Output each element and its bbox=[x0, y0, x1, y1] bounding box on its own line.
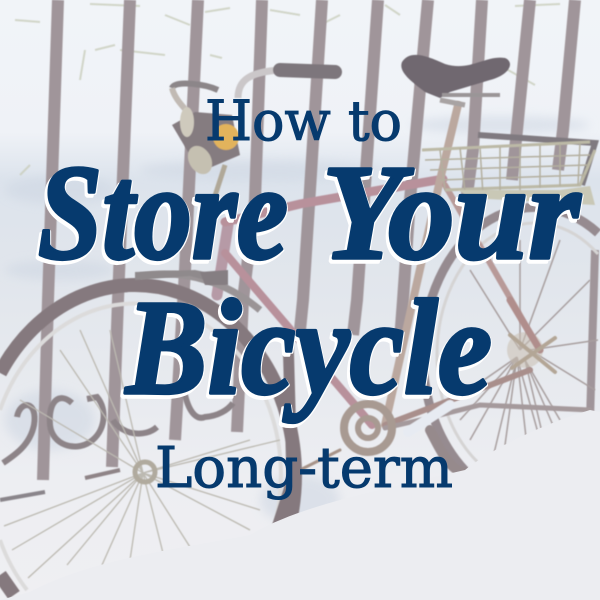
bicycle frame bbox=[217, 105, 590, 472]
rear wheel bbox=[423, 207, 598, 503]
heading: Store Your / Bicycle: Store bbox=[38, 138, 288, 288]
heading: Store Your / Bicycle: Bicycle bbox=[124, 273, 492, 423]
title bbox=[38, 89, 581, 501]
basket and rack bbox=[422, 135, 595, 205]
saddle bbox=[401, 55, 510, 105]
fence curls bbox=[3, 395, 233, 463]
heading: Store Your / Bicycle: Your bbox=[322, 138, 581, 288]
heading line: Long-term: Long-term bbox=[155, 436, 453, 501]
fence bars bbox=[43, 0, 595, 480]
heading: Store Your / Bicycle bbox=[38, 138, 581, 423]
snow foreground bbox=[0, 410, 600, 600]
front wheel bbox=[0, 274, 295, 595]
heading line: How to: How to bbox=[205, 89, 402, 153]
handlebars and brake bbox=[135, 70, 335, 285]
